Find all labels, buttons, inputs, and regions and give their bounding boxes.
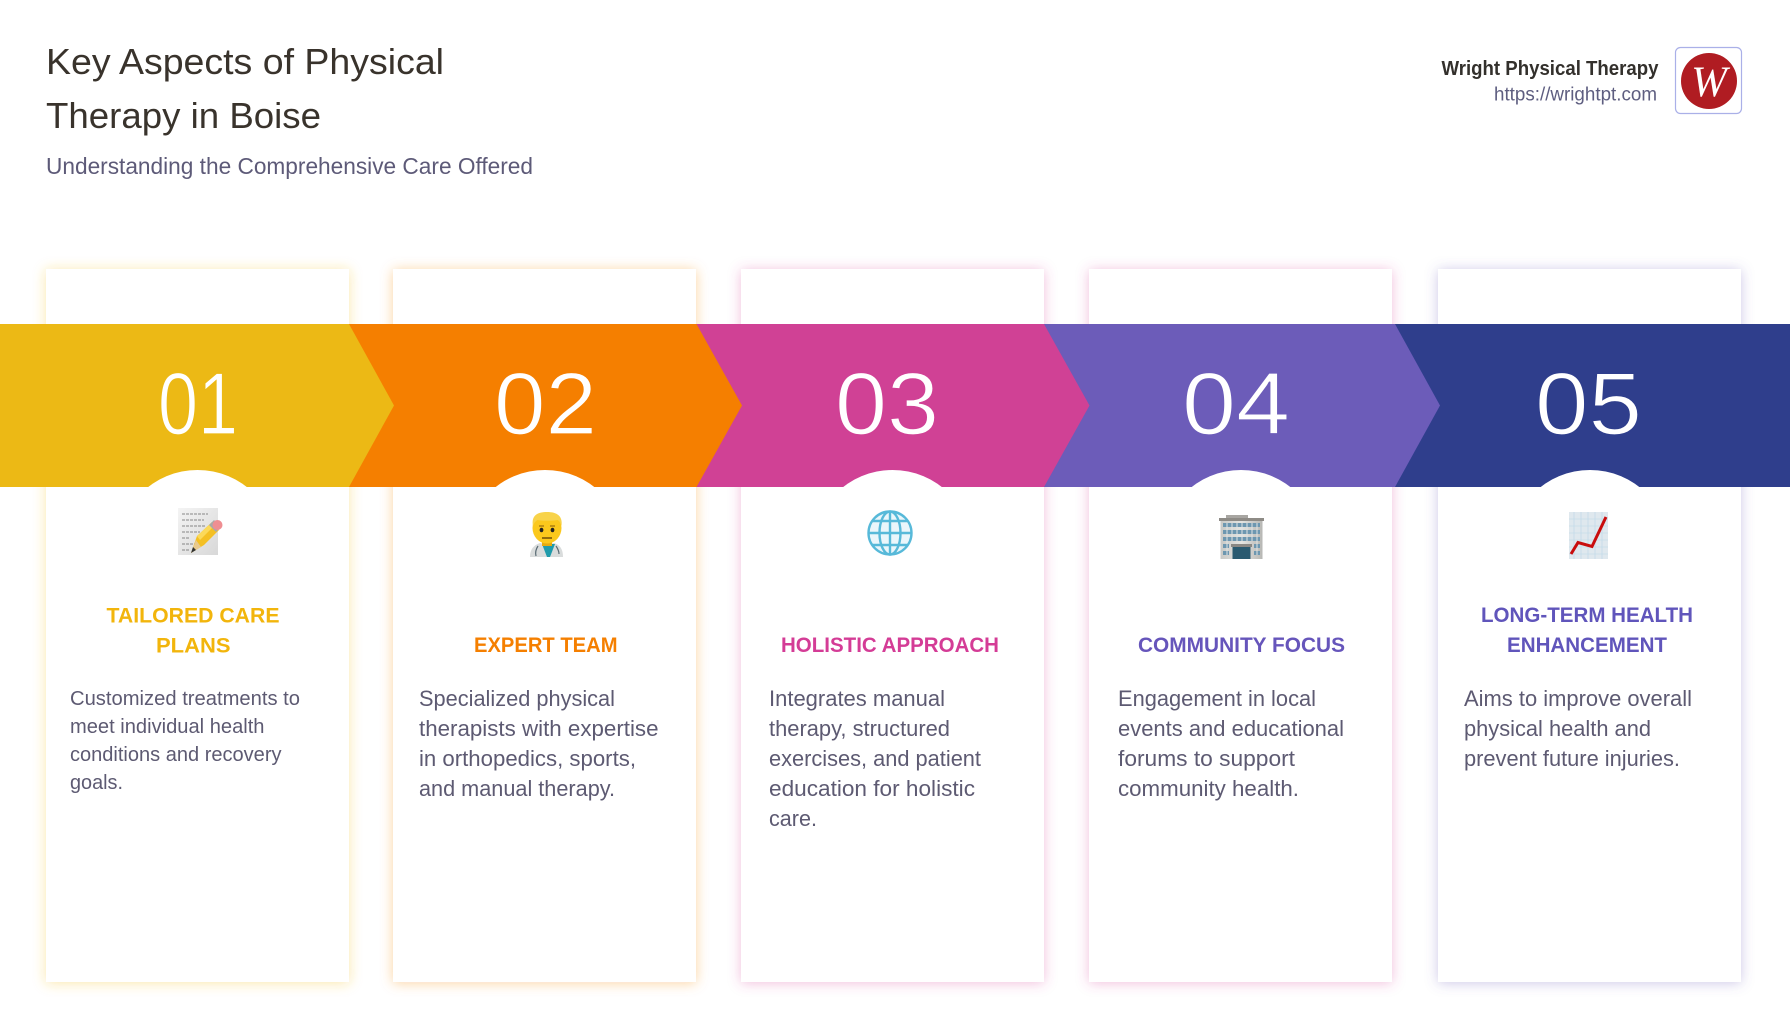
chevron 03 <box>690 324 1090 487</box>
description: in orthopedics, sports, <box>419 746 636 771</box>
heading: TAILORED CARE <box>106 604 280 628</box>
description <box>70 688 300 794</box>
description <box>419 686 658 801</box>
description <box>769 686 981 831</box>
description: exercises, and patient <box>769 746 981 771</box>
description: care. <box>769 806 817 831</box>
description: Customized treatments to <box>70 688 300 710</box>
step numbers: 04 <box>1182 354 1290 453</box>
description: prevent future injuries. <box>1464 746 1680 771</box>
subtitle: Understanding the Comprehensive Care Offered <box>46 153 533 179</box>
chevron 02 <box>340 324 742 487</box>
step numbers: 05 <box>1535 354 1642 453</box>
heading <box>1481 603 1693 657</box>
icon notches <box>117 470 1670 631</box>
panel: card 2 background <box>393 269 696 982</box>
heading: HOLISTIC APPROACH <box>781 633 999 657</box>
logo <box>1676 48 1742 114</box>
logo: W <box>1691 59 1731 106</box>
description: Aims to improve overall <box>1464 686 1692 711</box>
title: Therapy in Boise <box>46 95 321 136</box>
panel text: community focus <box>1118 633 1345 801</box>
description: physical health and <box>1464 716 1651 741</box>
description: forums to support <box>1118 746 1295 771</box>
chevron 05 <box>1390 324 1790 487</box>
chevron 01 <box>0 324 394 487</box>
panel text: holistic approach <box>769 633 999 831</box>
icon: office building <box>1219 515 1264 559</box>
description: education for holistic <box>769 776 975 801</box>
icon: chart increasing <box>1569 512 1608 559</box>
heading: LONG-TERM HEALTH <box>1481 603 1693 627</box>
step numbers <box>158 354 1642 453</box>
description <box>1118 686 1344 801</box>
panel: card 5 background <box>1438 269 1741 982</box>
step numbers: 01 <box>158 354 238 453</box>
description: Specialized physical <box>419 686 615 711</box>
heading: COMMUNITY FOCUS <box>1138 633 1345 657</box>
step numbers: 02 <box>494 354 597 453</box>
description: goals. <box>70 772 123 794</box>
chevron 04 <box>1040 324 1440 487</box>
description: therapists with expertise <box>419 716 658 741</box>
heading: EXPERT TEAM <box>474 633 618 657</box>
description: therapy, structured <box>769 716 950 741</box>
brand name and url: Wright Physical Therapy <box>1442 58 1659 80</box>
panel: card 1 background <box>46 269 349 982</box>
description: community health. <box>1118 776 1299 801</box>
panel: card 4 background <box>1089 269 1392 982</box>
heading: PLANS <box>156 634 230 658</box>
description: meet individual health <box>70 716 264 738</box>
description: conditions and recovery <box>70 744 282 766</box>
title: Key Aspects of Physical <box>46 41 444 82</box>
description <box>1464 686 1692 771</box>
panel text: expert team <box>419 633 658 801</box>
description: Integrates manual <box>769 686 945 711</box>
description: and manual therapy. <box>419 776 615 801</box>
brand name and url <box>1442 58 1659 106</box>
panel text: long-term health enhancement <box>1464 603 1693 771</box>
icon: memo with pencil <box>178 508 222 555</box>
heading: ENHANCEMENT <box>1507 633 1667 657</box>
icon: man health worker <box>530 512 563 557</box>
panel: card 3 background <box>741 269 1044 982</box>
brand name and url: https://wrightpt.com <box>1494 84 1657 106</box>
heading <box>106 604 280 658</box>
chevron band <box>0 324 1790 487</box>
icon: globe <box>868 512 912 554</box>
panel text: tailored care plans <box>70 604 300 794</box>
description: events and educational <box>1118 716 1344 741</box>
step numbers: 03 <box>835 354 939 453</box>
title <box>46 41 444 136</box>
description: Engagement in local <box>1118 686 1316 711</box>
